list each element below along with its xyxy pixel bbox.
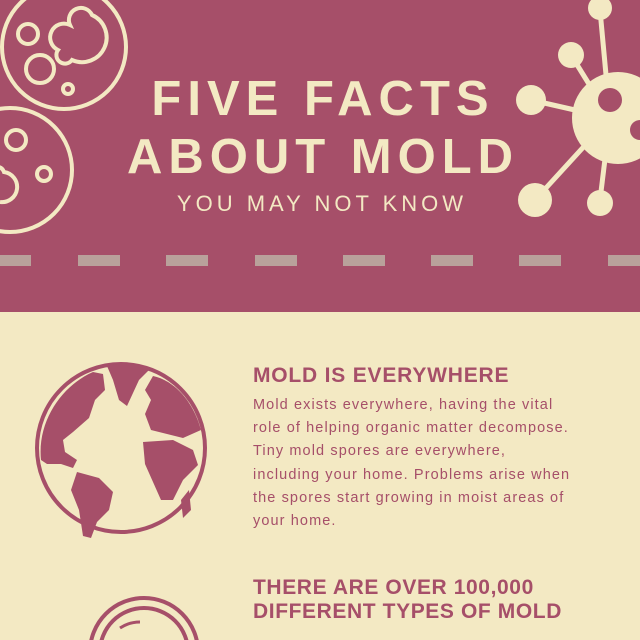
- heading: 100,000 types: THERE ARE OVER 100,000: [253, 576, 534, 599]
- icon: petri dish: [89, 596, 199, 640]
- icon: virus: [516, 0, 640, 217]
- text block: fact 1: Mold exists everywhere, having the vital: [253, 397, 553, 413]
- text block: fact 1: Tiny mold spores are everywhere,: [253, 443, 506, 459]
- heading: 100,000 types: DIFFERENT TYPES OF MOLD: [253, 600, 562, 623]
- text block: fact 1: role of helping organic matter decompose.: [253, 420, 569, 436]
- heading: mold is everywhere: MOLD IS EVERYWHERE: [253, 364, 509, 387]
- header panel: [0, 0, 640, 312]
- dashed divider: [0, 255, 640, 266]
- text block: fact 1: the spores start growing in moist areas of: [253, 490, 564, 506]
- icon: globe: [35, 362, 207, 538]
- heading: 100,000 types: [253, 576, 562, 623]
- title: FIVE FACTS: [151, 72, 495, 126]
- text block: fact 1: including your home. Problems arise when: [253, 467, 570, 483]
- subtitle: YOU MAY NOT KNOW: [177, 191, 467, 216]
- text block: fact 1: your home.: [253, 513, 337, 529]
- text block: fact 1: [253, 397, 570, 529]
- title: [127, 72, 519, 184]
- icon: petri dishes: [0, 0, 128, 234]
- title: ABOUT MOLD: [127, 130, 519, 184]
